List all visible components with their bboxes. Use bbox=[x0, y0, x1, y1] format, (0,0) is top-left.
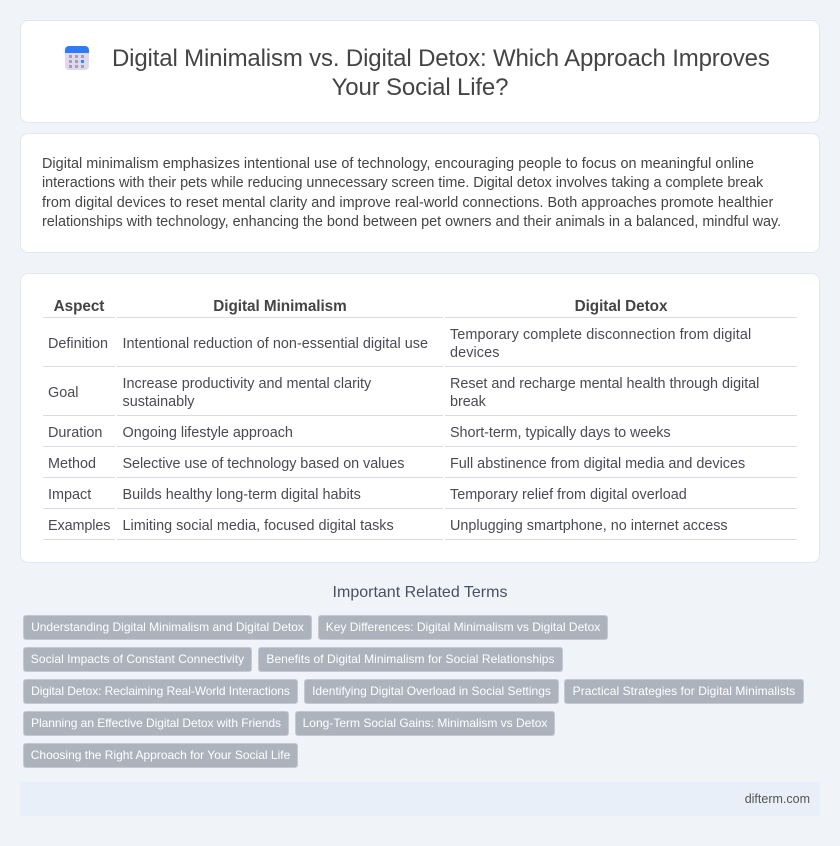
related terms heading: Important Related Terms bbox=[333, 584, 507, 601]
tag: Key Differences: Digital Minimalism vs Digital Detox bbox=[326, 620, 600, 634]
row: definition: Temporary complete disconnection from digital bbox=[450, 327, 751, 343]
tag: Digital Detox: Reclaiming Real-World Interactions bbox=[31, 684, 290, 698]
table header bbox=[54, 298, 668, 315]
tag: Social Impacts of Constant Connectivity bbox=[31, 652, 244, 666]
row: definition: Intentional reduction of non-essential digital use bbox=[122, 336, 428, 352]
title bbox=[112, 45, 770, 101]
row: goal: sustainably bbox=[122, 394, 194, 410]
row: impact bbox=[48, 487, 687, 503]
row: definition: Definition bbox=[48, 336, 108, 352]
tag bbox=[23, 711, 289, 736]
comparison table panel bbox=[20, 273, 820, 563]
tag: Identifying Digital Overload in Social Settings bbox=[312, 684, 551, 698]
tag bbox=[318, 615, 608, 640]
title: Your Social Life? bbox=[332, 74, 508, 101]
tag bbox=[258, 647, 563, 672]
row: goal: Goal bbox=[48, 385, 78, 401]
row: examples: Unplugging smartphone, no internet access bbox=[450, 518, 728, 534]
row: definition: devices bbox=[450, 345, 500, 361]
row: goal bbox=[48, 376, 759, 410]
table header: Digital Detox bbox=[575, 298, 667, 315]
intro text: Digital minimalism emphasizes intentional use of technology, encouraging people to focus on meaningful online bbox=[42, 156, 754, 172]
row: method: Full abstinence from digital media and devices bbox=[450, 456, 745, 472]
tag bbox=[23, 615, 312, 640]
icon: calendar bbox=[65, 46, 89, 70]
tag: Benefits of Digital Minimalism for Social Relationships bbox=[266, 652, 555, 666]
tag: Long-Term Social Gains: Minimalism vs Detox bbox=[303, 716, 547, 730]
row: examples bbox=[48, 518, 728, 534]
intro text: relationships with technology, enhancing the bond between pet owners and their animals in a balanced, mindful way. bbox=[42, 214, 781, 230]
table header: Digital Minimalism bbox=[213, 298, 347, 315]
table header: Aspect bbox=[54, 298, 104, 315]
tag bbox=[295, 711, 555, 736]
tag: Understanding Digital Minimalism and Digital Detox bbox=[31, 620, 304, 634]
row: duration: Ongoing lifestyle approach bbox=[122, 425, 293, 441]
row: goal: Increase productivity and mental clarity bbox=[122, 376, 371, 392]
row: impact: Temporary relief from digital overload bbox=[450, 487, 687, 503]
row: duration: Duration bbox=[48, 425, 102, 441]
footer bar bbox=[20, 782, 820, 816]
intro text bbox=[42, 156, 781, 230]
tag: Practical Strategies for Digital Minimalists bbox=[573, 684, 795, 698]
intro text: from digital devices to reset mental clarity and improve real-world connections. Both approaches promote healthier bbox=[42, 195, 773, 211]
intro text: interactions with their pets while reducing unnecessary screen time. Digital detox involves taking a complete break bbox=[42, 175, 763, 191]
intro panel bbox=[20, 133, 820, 253]
tag: Planning an Effective Digital Detox with Friends bbox=[31, 716, 281, 730]
header panel bbox=[20, 20, 820, 123]
tag bbox=[23, 743, 298, 768]
tag bbox=[23, 679, 298, 704]
row: definition bbox=[48, 327, 751, 361]
row: duration: Short-term, typically days to weeks bbox=[450, 425, 671, 441]
row: method: Selective use of technology based on values bbox=[122, 456, 404, 472]
row: examples: Examples bbox=[48, 518, 110, 534]
row: method: Method bbox=[48, 456, 96, 472]
row: impact: Impact bbox=[48, 487, 91, 503]
tag bbox=[304, 679, 559, 704]
row: duration bbox=[48, 425, 671, 441]
tag bbox=[564, 679, 804, 704]
row: impact: Builds healthy long-term digital habits bbox=[122, 487, 361, 503]
row: goal: break bbox=[450, 394, 486, 410]
row: goal: Reset and recharge mental health through digital bbox=[450, 376, 759, 392]
row: method bbox=[48, 456, 745, 472]
tag bbox=[23, 647, 252, 672]
related terms tags bbox=[23, 615, 804, 768]
row: examples: Limiting social media, focused digital tasks bbox=[122, 518, 394, 534]
footer source: difterm.com bbox=[745, 792, 810, 806]
tag: Choosing the Right Approach for Your Social Life bbox=[31, 748, 290, 762]
title: Digital Minimalism vs. Digital Detox: Which Approach Improves bbox=[112, 45, 770, 72]
